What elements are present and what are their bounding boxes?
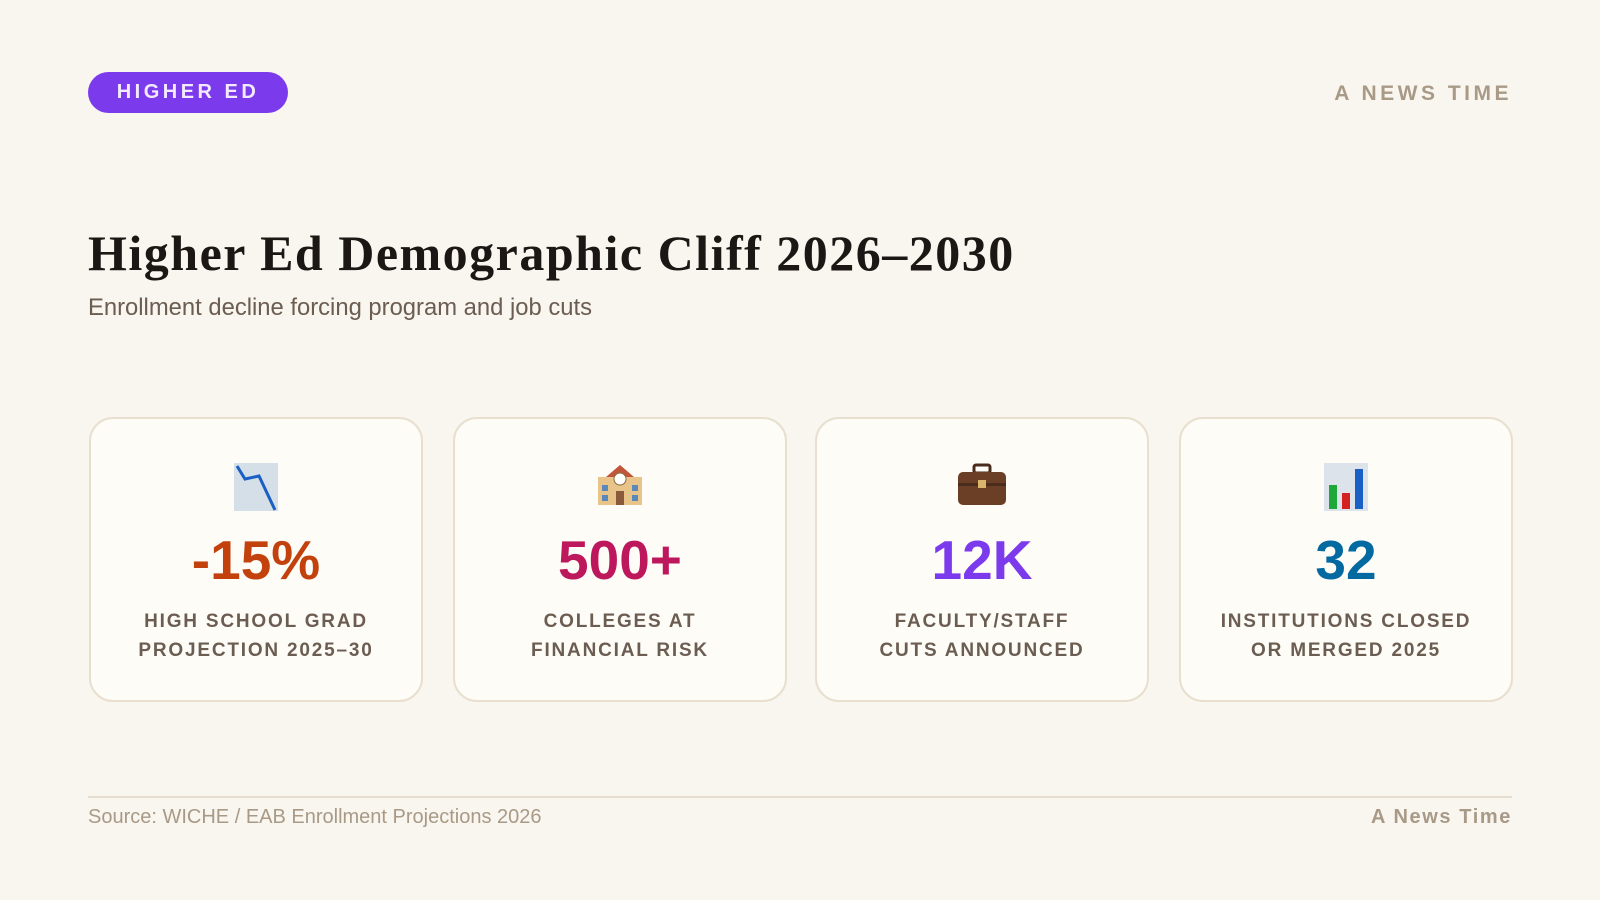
source: Source: WICHE / EAB Enrollment Projections 2026	[88, 806, 542, 828]
footer brand: A News Time	[1371, 806, 1512, 828]
label	[531, 611, 709, 661]
card: closures	[1179, 417, 1513, 702]
tag pill	[88, 72, 288, 113]
label: OR MERGED 2025	[1251, 640, 1441, 661]
icon: school	[598, 465, 642, 505]
label: INSTITUTIONS CLOSED	[1221, 611, 1471, 632]
number: -15%	[192, 529, 320, 591]
label: COLLEGES AT	[544, 611, 696, 632]
icon: chart decreasing	[234, 463, 278, 511]
card: cuts	[815, 417, 1149, 702]
number: 12K	[932, 529, 1032, 591]
number: 32	[1315, 529, 1377, 591]
title: Higher Ed Demographic Cliff 2026–2030	[88, 225, 1015, 281]
card: colleges at risk	[453, 417, 787, 702]
label: CUTS ANNOUNCED	[880, 640, 1084, 661]
card: grad projection	[89, 417, 423, 702]
label	[1221, 611, 1471, 661]
icon: bar chart	[1324, 463, 1368, 511]
number: 500+	[558, 529, 682, 591]
label: FACULTY/STAFF	[895, 611, 1069, 632]
label	[138, 611, 374, 661]
label: PROJECTION 2025–30	[138, 640, 374, 661]
subtitle: Enrollment decline forcing program and job cuts	[88, 294, 592, 321]
label: HIGH SCHOOL GRAD	[144, 611, 368, 632]
icon: briefcase	[958, 464, 1006, 505]
label: FINANCIAL RISK	[531, 640, 709, 661]
brand: A NEWS TIME	[1334, 82, 1512, 105]
tag pill: HIGHER ED	[117, 81, 259, 103]
label	[880, 611, 1084, 661]
